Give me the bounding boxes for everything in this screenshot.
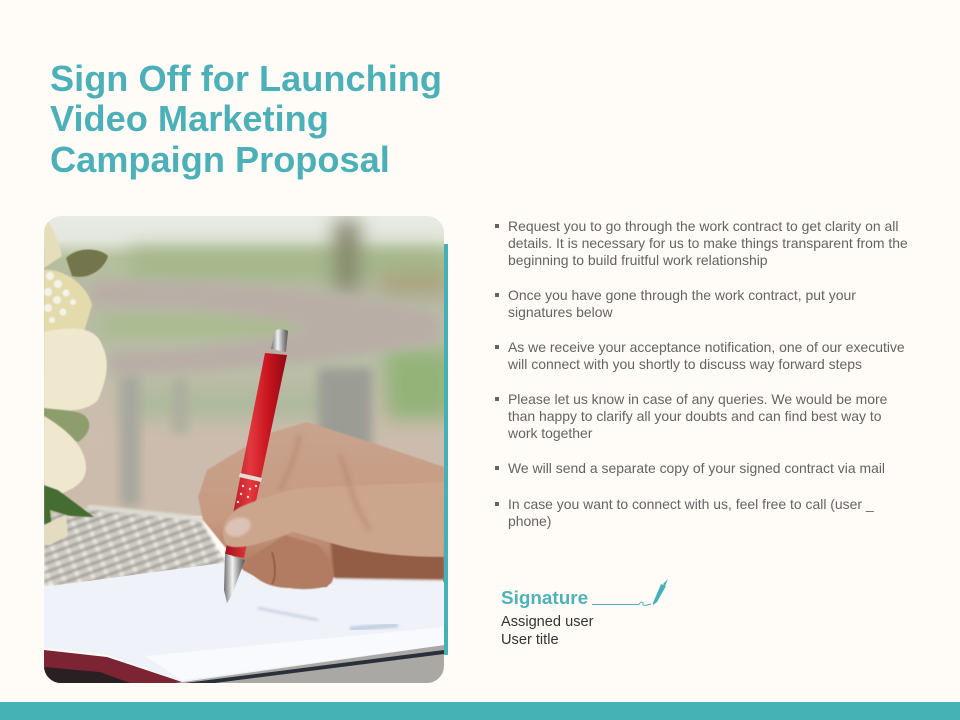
bullet 3: will connect with you shortly to discuss way forward steps	[508, 356, 862, 372]
thumbnail	[224, 516, 252, 538]
bullet 5: We will send a separate copy of your signed contract via mail	[508, 460, 885, 476]
thumb	[223, 482, 444, 557]
blurred park background	[44, 216, 455, 516]
icon: pen with signature line	[592, 579, 668, 606]
lower fingers	[246, 535, 333, 589]
bullet 2: signatures below	[508, 304, 613, 320]
bullet 2: Once you have gone through the work contract, put your	[508, 287, 856, 303]
bullet 1: details. It is necessary for us to make things transparent from the	[508, 235, 908, 251]
bullet 6	[495, 496, 874, 529]
user title: User title	[501, 632, 559, 648]
shadow under the palm	[330, 542, 444, 582]
bullet 1: beginning to build fruitful work relationship	[508, 252, 768, 268]
bullet 6: phone)	[508, 513, 551, 529]
document on clipboard	[44, 563, 444, 683]
bullet 1	[495, 218, 908, 268]
teal accent bar beside photo	[443, 244, 448, 655]
bullet list	[495, 218, 908, 529]
blurred curved bench	[92, 282, 442, 376]
red pen	[224, 329, 288, 603]
bullet 1: Request you to go through the work contract to get clarity on all	[508, 218, 898, 234]
signature block	[501, 579, 668, 648]
bullet 4: Please let us know in case of any queries. We would be more	[508, 391, 887, 407]
thumb and fingers	[223, 435, 444, 589]
bullet 4: than happy to clarify all your doubts and can find best way to	[508, 408, 881, 424]
title: Video Marketing	[50, 98, 329, 139]
knuckle shading	[280, 435, 370, 530]
title	[50, 58, 442, 180]
title: Campaign Proposal	[50, 138, 390, 180]
photo: hand signing a document with a red pen	[44, 216, 444, 683]
bullet 3: As we receive your acceptance notification, one of our executive	[508, 339, 905, 355]
hand back	[198, 422, 444, 587]
title: Sign Off for Launching	[50, 58, 442, 98]
bullet 6: In case you want to connect with us, feel free to call (user _	[508, 496, 874, 512]
bottom teal band	[0, 702, 960, 720]
bullet 2	[495, 287, 856, 320]
bullet 4	[495, 391, 887, 441]
bullet 3	[495, 339, 905, 372]
bullet 4: work together	[508, 425, 592, 441]
signature heading: Signature	[501, 588, 588, 609]
assigned user: Assigned user	[501, 614, 593, 630]
flowers	[44, 216, 108, 545]
mesh table top	[44, 507, 232, 586]
